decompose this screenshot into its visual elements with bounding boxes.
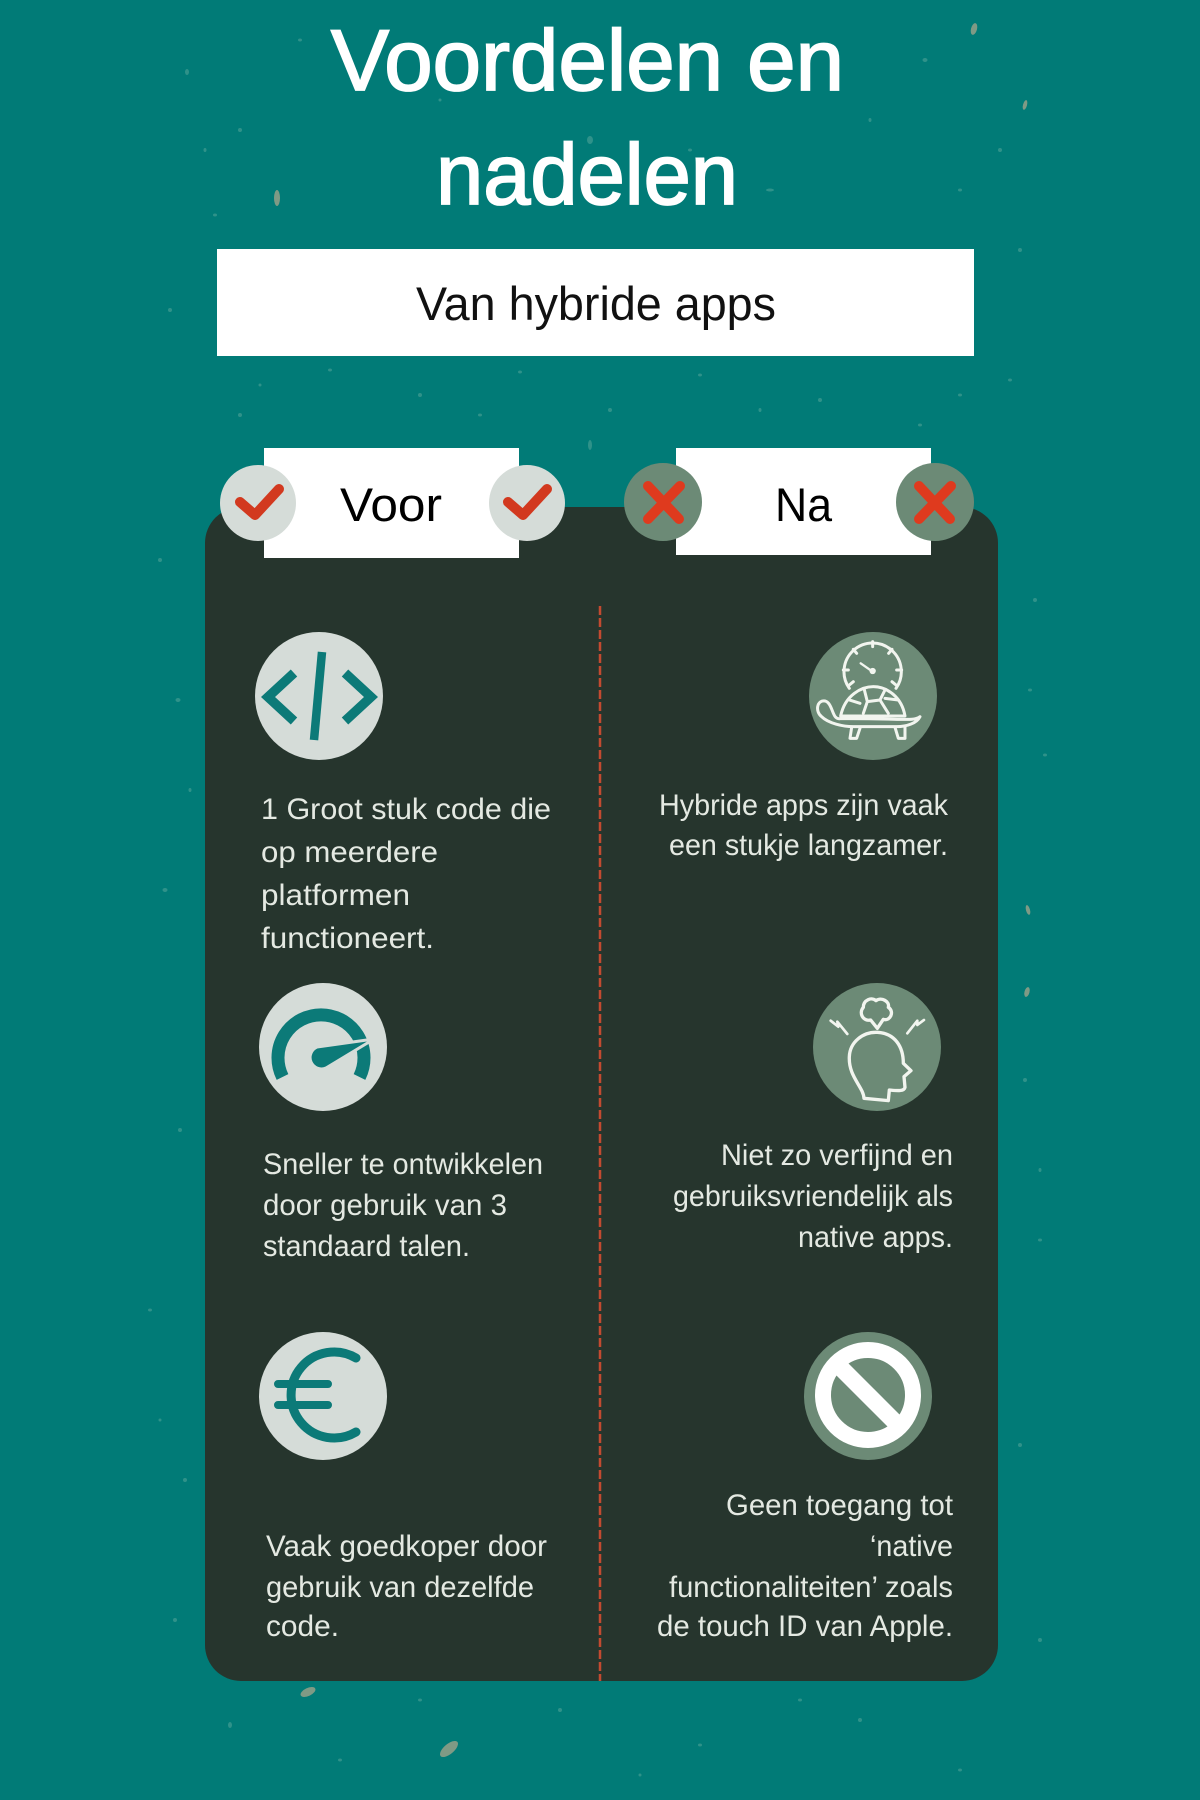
panel: comparison background xyxy=(205,507,998,1681)
header: Voor xyxy=(220,448,565,558)
icon: overloaded head xyxy=(813,983,941,1111)
title: Voordelen en xyxy=(331,13,844,109)
text: con 1: Hybride apps zijn vaak xyxy=(659,789,949,822)
text: con 2: Niet zo verfijnd en xyxy=(721,1139,953,1172)
text: con 1 xyxy=(659,789,949,862)
text: con 2: gebruiksvriendelijk als xyxy=(673,1180,953,1213)
text: pro 2: Sneller te ontwikkelen xyxy=(263,1148,543,1181)
text: pro 3: Vaak goedkoper door xyxy=(266,1530,547,1563)
text: con 2 xyxy=(673,1139,953,1254)
text: con 1: een stukje langzamer. xyxy=(669,829,948,862)
text: pro 1: platformen xyxy=(261,879,410,912)
header: Voor: Voor xyxy=(340,478,442,531)
title xyxy=(331,13,844,223)
header: Na xyxy=(624,448,974,555)
icon: euro xyxy=(259,1332,387,1460)
center divider xyxy=(599,606,601,1681)
text: pro 2: door gebruik van 3 xyxy=(263,1189,507,1222)
text: con 2: native apps. xyxy=(798,1221,953,1254)
text: pro 2: standaard talen. xyxy=(263,1230,470,1263)
icon: slow turtle xyxy=(809,632,937,760)
subtitle banner xyxy=(217,249,974,356)
text: pro 3: gebruik van dezelfde xyxy=(266,1571,534,1604)
text: con 3: ‘native xyxy=(870,1530,953,1563)
text: con 3: de touch ID van Apple. xyxy=(657,1610,953,1643)
header: Na: Na xyxy=(775,478,833,531)
icon: code brackets xyxy=(255,632,383,760)
subtitle banner: Van hybride apps xyxy=(416,277,776,330)
icon: prohibited sign xyxy=(804,1332,932,1460)
text: pro 1 xyxy=(261,793,551,955)
text: pro 1: op meerdere xyxy=(261,836,438,869)
text: con 3: functionaliteiten’ zoals xyxy=(669,1571,953,1604)
text: pro 1: 1 Groot stuk code die xyxy=(261,793,551,826)
text: pro 3: code. xyxy=(266,1610,339,1643)
icon: speedometer xyxy=(259,983,387,1111)
text: con 3: Geen toegang tot xyxy=(726,1489,954,1522)
text: pro 1: functioneert. xyxy=(261,922,434,955)
title: nadelen xyxy=(436,127,738,223)
text: con 3 xyxy=(657,1489,954,1643)
text: pro 2 xyxy=(263,1148,543,1263)
text: pro 3 xyxy=(266,1530,547,1643)
